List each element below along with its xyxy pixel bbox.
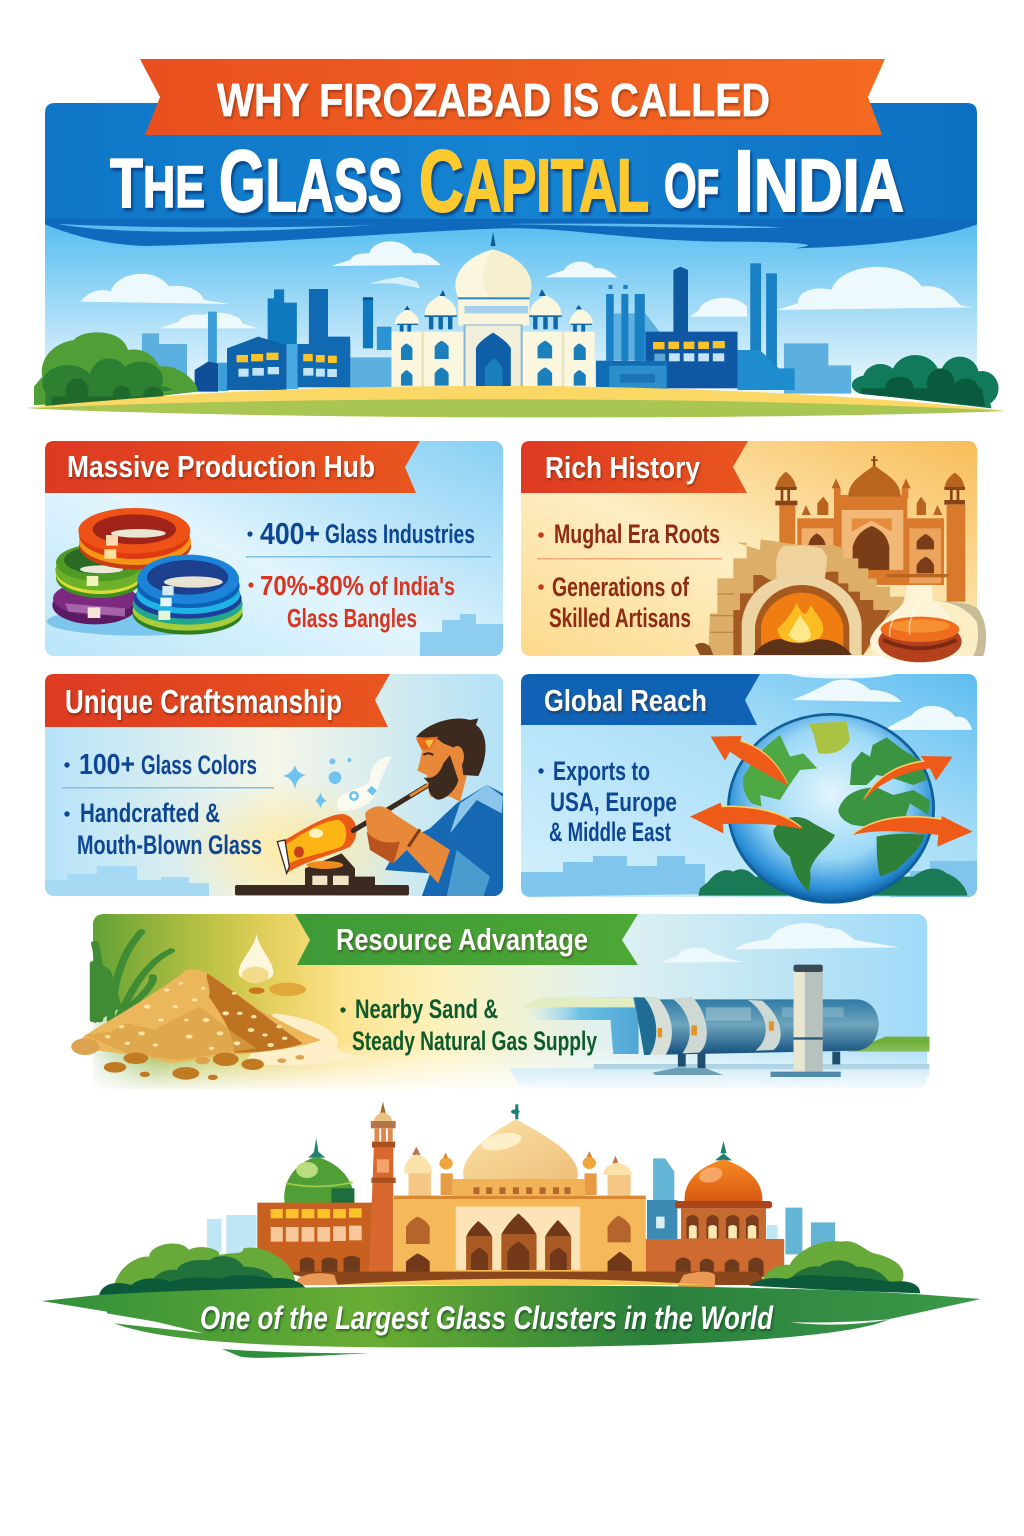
text: production facts: 70%-80% bbox=[260, 570, 364, 601]
panel: Unique Craftsmanship bbox=[45, 674, 503, 920]
blue bangle bbox=[133, 593, 243, 635]
title ribbon bbox=[140, 59, 885, 135]
illustration: molten glass flask bbox=[870, 585, 986, 662]
panel: header banner bbox=[26, 59, 1006, 417]
text: export facts: Exports to bbox=[553, 756, 650, 786]
header sky bbox=[39, 218, 992, 393]
text: history facts bbox=[537, 519, 722, 633]
purple bangle bbox=[52, 586, 138, 624]
text: craft facts: 100+ bbox=[79, 749, 135, 781]
heading ribbon: Resource Advantage bbox=[336, 922, 588, 957]
text: resource facts: Nearby Sand & bbox=[355, 994, 498, 1024]
text: production facts: 400+ bbox=[260, 516, 320, 551]
heading ribbon: Global Reach bbox=[544, 683, 707, 718]
panel: Massive Production Hub bbox=[45, 441, 503, 656]
text: craft facts: Glass Colors bbox=[141, 750, 257, 780]
title ribbon: WHY FIROZABAD IS CALLED bbox=[217, 74, 770, 126]
text: craft facts bbox=[62, 749, 274, 860]
panel soft lower edge bbox=[85, 1010, 935, 1094]
main title: CAPITAL bbox=[419, 133, 649, 230]
text: craft facts: Handcrafted & bbox=[80, 798, 220, 828]
heading ribbon: Rich History bbox=[545, 450, 701, 485]
illustration: globe with export arrows bbox=[690, 714, 973, 902]
minaret bbox=[369, 1102, 396, 1275]
main title: INDIA bbox=[734, 133, 904, 230]
illustration: header skyline bbox=[142, 263, 851, 394]
illustration: Taj Mahal style monument bbox=[391, 232, 595, 387]
green bangle bbox=[56, 557, 144, 598]
central palace bbox=[394, 1104, 646, 1275]
text: resource facts bbox=[340, 994, 597, 1056]
main title: THE bbox=[110, 144, 205, 222]
text: production facts: Glass Bangles bbox=[287, 603, 417, 633]
heading ribbon bbox=[295, 914, 638, 965]
trees bbox=[99, 1241, 920, 1297]
text: export facts: USA, Europe bbox=[550, 787, 677, 817]
header blue band bbox=[45, 103, 977, 235]
main title: GLASS bbox=[219, 133, 402, 230]
text: production facts bbox=[246, 516, 491, 633]
illustration: brick kiln with fire bbox=[695, 539, 905, 655]
left building with green dome bbox=[257, 1138, 373, 1274]
illustration: glassblower artisan bbox=[235, 718, 503, 897]
base wall bbox=[283, 1272, 768, 1285]
bottom green ribbon with tagline: One of the Largest Glass Clusters in the World bbox=[200, 1300, 774, 1336]
icon: glass bangles bbox=[47, 508, 243, 636]
arrows bbox=[722, 740, 942, 833]
bottom green ribbon with tagline bbox=[42, 1286, 981, 1358]
heading ribbon bbox=[521, 674, 760, 725]
main title bbox=[110, 133, 904, 230]
heading ribbon: Massive Production Hub bbox=[67, 449, 375, 484]
text: history facts: Skilled Artisans bbox=[549, 603, 691, 633]
heading ribbon bbox=[45, 674, 390, 727]
illustration: clouds and ground bbox=[509, 923, 930, 1089]
panel: Resource Advantage bbox=[71, 914, 935, 1094]
illustration: natural gas pipeline bbox=[523, 965, 879, 1077]
heading ribbon: Unique Craftsmanship bbox=[65, 683, 342, 720]
text: export facts bbox=[538, 756, 677, 847]
illustration: trees left and right bbox=[34, 332, 999, 408]
heading ribbon bbox=[521, 441, 748, 493]
illustration: sand pile with grass and drop bbox=[71, 932, 372, 1080]
right building with orange dome bbox=[646, 1141, 784, 1277]
illustration: Mughal fort bbox=[775, 456, 965, 602]
illustration: heritage city skyline bbox=[99, 1102, 920, 1297]
heading ribbon bbox=[45, 441, 420, 493]
text: production facts: Glass Industries bbox=[325, 519, 475, 549]
panel: Global Reach bbox=[521, 674, 977, 902]
text: craft facts: Mouth-Blown Glass bbox=[77, 830, 262, 860]
red bangle bbox=[79, 523, 191, 569]
text: history facts: Mughal Era Roots bbox=[554, 519, 720, 549]
text: production facts: of India's bbox=[369, 571, 455, 601]
text: resource facts: Steady Natural Gas Supply bbox=[352, 1026, 597, 1056]
main title: OF bbox=[664, 152, 719, 221]
illustration: ground bbox=[26, 386, 1006, 417]
text: export facts: & Middle East bbox=[549, 817, 671, 847]
panel: Rich History bbox=[521, 441, 986, 662]
text: history facts: Generations of bbox=[552, 572, 690, 602]
